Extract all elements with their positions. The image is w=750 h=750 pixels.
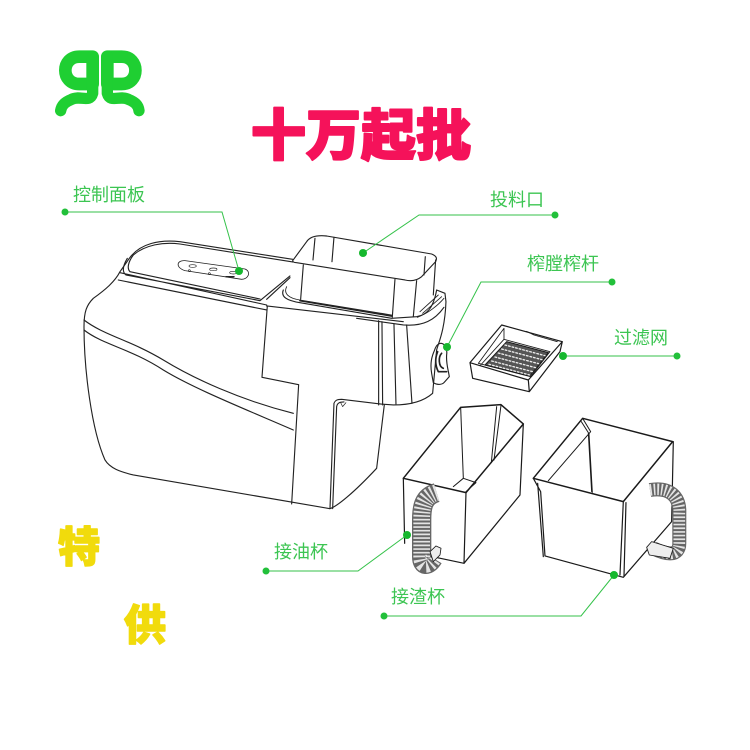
callout: 过滤网 <box>559 328 680 360</box>
lid <box>120 243 293 305</box>
front step <box>262 306 299 504</box>
residue cup <box>533 418 679 577</box>
hopper <box>293 236 436 281</box>
hopper housing <box>283 290 446 405</box>
callout: 接油杯: 接油杯 <box>274 542 328 562</box>
yellow character: 特: 特 <box>58 524 100 571</box>
control panel <box>178 261 249 279</box>
callout: 接油杯 <box>262 531 411 574</box>
callout: 接渣杯: 接渣杯 <box>391 587 445 607</box>
filter screen <box>470 325 562 392</box>
callout: 控制面板: 控制面板 <box>73 185 145 205</box>
yellow character: 供: 供 <box>124 602 166 649</box>
parts <box>403 325 679 577</box>
callout: 过滤网: 过滤网 <box>614 328 668 348</box>
callout: 榨膛榨杆 <box>443 254 616 351</box>
title: 十万起批 <box>251 105 471 167</box>
callout: 投料口 <box>359 190 558 257</box>
press lever <box>431 343 449 384</box>
callout: 投料口: 投料口 <box>490 190 544 210</box>
callout: 榨膛榨杆: 榨膛榨杆 <box>527 254 599 274</box>
callout: 接渣杯 <box>380 571 618 620</box>
body outline <box>84 241 384 509</box>
logo <box>61 57 139 111</box>
callout: 控制面板 <box>62 185 243 275</box>
machine body <box>84 236 449 509</box>
oil cup <box>403 405 523 564</box>
